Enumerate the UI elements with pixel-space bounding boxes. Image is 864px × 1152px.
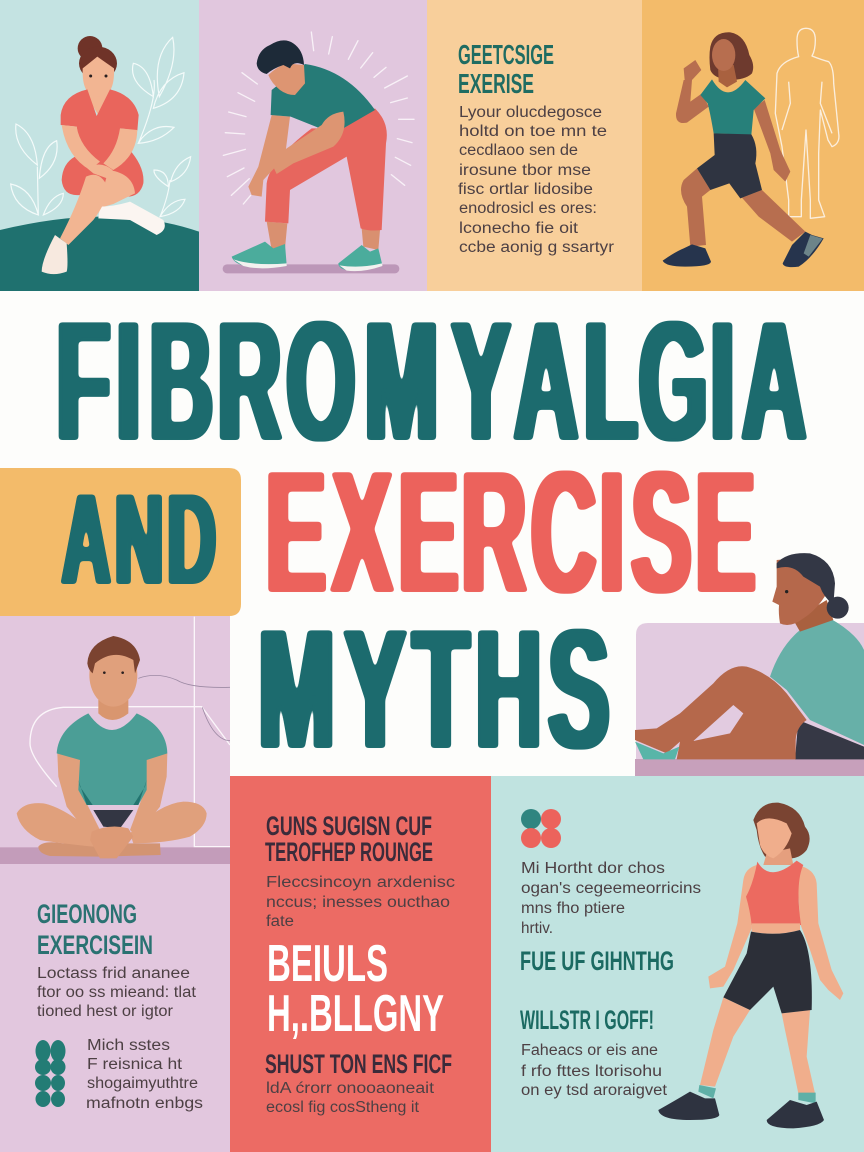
man figure <box>635 553 864 759</box>
heading: EXERCISEIN <box>37 930 153 960</box>
floor band <box>0 847 230 864</box>
large white callout: BEIULS <box>267 935 388 993</box>
panel: and label: AND <box>62 466 216 612</box>
body text: Fleccsincoyn arxdenisc <box>266 874 455 891</box>
title <box>0 286 806 785</box>
body text: tioned hest or igtor <box>37 1003 173 1020</box>
icon: leaf stack <box>35 1040 66 1107</box>
side text <box>86 1037 203 1112</box>
body text: Lyour olucdegosce <box>459 104 602 121</box>
body text: cecdlaoo sen de <box>459 142 578 159</box>
closing text <box>521 1042 668 1099</box>
panel: and label <box>0 466 241 616</box>
closing text: ldA ćrorr onooaoneait <box>266 1080 435 1097</box>
title line: fibromyalgia: FIBROMYALGIA <box>56 286 806 476</box>
subheading: WILLSTR I GOFF! <box>520 1005 654 1035</box>
body text: lconecho fie oit <box>459 220 579 237</box>
subheading: FUE UF GIHNTHG <box>520 946 674 976</box>
body text <box>37 965 197 1020</box>
body text: hrtiv. <box>521 920 553 937</box>
woman figure <box>663 32 824 267</box>
man figure <box>17 636 207 858</box>
closing text: f rfo fttes ltorisohu <box>521 1063 662 1080</box>
icon: pain rays <box>223 32 414 204</box>
icon: body outline <box>775 28 839 218</box>
body text: ftor oo ss mieand: tlat <box>37 984 197 1001</box>
closing text: Faheacs or eis ane <box>521 1042 658 1059</box>
body text: irosune tbor mse <box>459 162 591 179</box>
body text: ccbe aonig g ssartyr <box>459 239 614 256</box>
body text <box>521 860 701 937</box>
body text: ogan's cegeemeorricins <box>521 880 701 897</box>
large white callout <box>267 935 444 1043</box>
man figure <box>232 40 387 271</box>
body text: Mi Hortht dor chos <box>521 860 665 877</box>
body text: Loctass frid ananee <box>37 965 190 982</box>
heading <box>37 899 153 960</box>
side text: Mich sstes <box>87 1037 170 1054</box>
heading: GUNS SUGISN CUF <box>266 811 432 841</box>
heading: GEETCSIGE <box>458 39 554 70</box>
side text: F reisnica ht <box>87 1056 183 1073</box>
heading: GIEONONG <box>37 899 137 929</box>
subheading: SHUST TON ENS FICF <box>265 1049 452 1079</box>
body text: mns fho ptiere <box>521 900 625 917</box>
hill <box>0 217 199 291</box>
icon: decorative leaves <box>11 37 191 217</box>
panel: woman lunging with body outline <box>642 0 864 291</box>
large white callout: H,.BLLGNY <box>267 985 444 1043</box>
body text: nccus; inesses oucthao <box>266 894 450 911</box>
body text: enodrosicl es ores: <box>459 200 597 217</box>
heading <box>265 811 433 867</box>
panel: man stretching leg <box>635 553 864 776</box>
body text: fate <box>266 913 294 930</box>
side text: mafnotn enbgs <box>86 1095 203 1112</box>
panel: seated woman holding knee <box>0 0 199 291</box>
panel: man bending with knee pain <box>199 0 427 291</box>
panel: peach text block <box>427 0 642 291</box>
panel: man sitting cross-legged <box>0 616 230 1152</box>
heading: EXERISE <box>458 68 534 99</box>
icon: four dots <box>521 809 561 848</box>
body text <box>266 874 455 930</box>
panel: mint text and standing woman <box>491 776 864 1152</box>
woman figure <box>658 803 843 1128</box>
woman figure <box>42 36 165 274</box>
closing text <box>266 1080 435 1116</box>
panel: coral text block <box>230 776 491 1152</box>
closing text: ecosl fig cosStheng it <box>266 1099 420 1116</box>
heading: TEROFHEP ROUNGE <box>265 837 433 867</box>
outline shapes <box>30 617 230 847</box>
side text: shogaimyuthtre <box>87 1075 198 1092</box>
closing text: on ey tsd aroraigvet <box>521 1082 668 1099</box>
body text: holtd on toe mn te <box>459 123 607 140</box>
title line: exercise: EXERCISE <box>266 435 756 630</box>
title line: myths: MYTHS <box>258 595 610 785</box>
body text <box>458 104 614 256</box>
floor shadow <box>223 264 399 273</box>
body text: fisc ortlar lidosibe <box>458 181 593 198</box>
heading <box>458 39 554 99</box>
